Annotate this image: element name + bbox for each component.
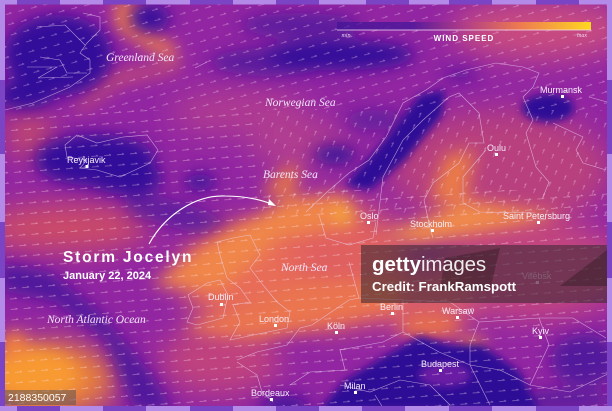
city labels: Budapest — [421, 359, 460, 369]
left border — [0, 0, 5, 411]
arrow to storm — [149, 196, 276, 244]
right border — [607, 0, 612, 411]
city labels: Milan — [344, 381, 366, 391]
watermark: getty images: gettyimages — [372, 253, 486, 276]
watermark: getty images — [361, 245, 607, 303]
city labels: Warsaw — [442, 306, 475, 316]
sea labels: North Atlantic Ocean — [46, 314, 146, 326]
city labels: Kyiv — [532, 326, 550, 336]
city labels: London — [259, 314, 289, 324]
legend axis — [337, 29, 591, 31]
sea labels — [46, 52, 336, 326]
image id tag — [5, 390, 76, 405]
image id tag: 2188350057 — [8, 392, 67, 404]
city labels: Murmansk — [540, 85, 583, 95]
city labels: Oslo — [360, 211, 379, 221]
city labels: Stockholm — [410, 219, 452, 229]
watermark: getty images: Credit: FrankRamspott — [372, 279, 517, 294]
city labels: Reykjavik — [67, 155, 106, 165]
city labels: Bordeaux — [251, 388, 290, 398]
city labels: Berlin — [380, 302, 403, 312]
city labels: Oulu — [487, 143, 506, 153]
legend colour bar — [337, 22, 591, 30]
legend min label: min — [342, 33, 350, 39]
bottom border — [0, 406, 612, 411]
storm title: Storm Jocelyn — [63, 249, 193, 266]
sea labels: Barents Sea — [263, 169, 318, 181]
sea labels: North Sea — [280, 262, 328, 274]
city labels: Dublin — [208, 292, 234, 302]
city labels — [67, 85, 583, 401]
sea labels: Norwegian Sea — [264, 97, 336, 109]
top border — [0, 0, 612, 4]
storm date: January 22, 2024 — [63, 270, 152, 282]
sea labels: Greenland Sea — [106, 52, 174, 64]
city labels: Saint Petersburg — [503, 211, 570, 221]
legend: wind speed — [337, 22, 591, 43]
city labels: Vitebsk — [522, 271, 552, 281]
legend title: WIND SPEED — [434, 34, 494, 43]
legend max label: max — [577, 33, 587, 39]
city labels: Köln — [327, 321, 345, 331]
